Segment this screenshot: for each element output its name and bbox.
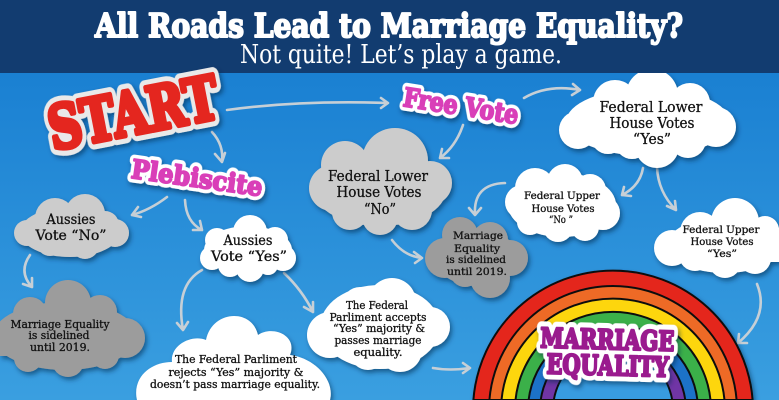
cloud: Parliament accepts: Parliment accepts xyxy=(330,311,427,324)
cloud: Federal Upper House Votes Yes: Federal Upper xyxy=(682,224,760,236)
cloud: sidelined until 2019 (left): until 2019. xyxy=(30,341,90,354)
Marriage Equality sign xyxy=(539,323,675,384)
cloud: Aussies Vote No: Vote “No” xyxy=(34,228,106,244)
title: All Roads Lead to Marriage Equality? xyxy=(94,6,683,45)
cloud: Federal Lower House Votes No: Federal Lower xyxy=(328,169,428,185)
cloud: Parliament accepts: The Federal xyxy=(346,299,408,312)
cloud: sidelined until 2019 (left): Marriage Equality xyxy=(10,318,110,331)
cloud: Federal Upper House Votes Yes: “Yes” xyxy=(707,248,737,260)
cloud: Federal Upper House Votes No: “No ” xyxy=(549,214,573,226)
cloud: Federal Upper House Votes Yes xyxy=(654,198,779,278)
cloud: sidelined until 2019 (right) xyxy=(425,217,528,298)
cloud: Federal Lower House Votes No: “No” xyxy=(364,202,396,218)
cloud: Parliament accepts: equality. xyxy=(354,346,402,359)
rainbow xyxy=(473,271,753,400)
cloud: sidelined until 2019 (left) xyxy=(0,280,145,377)
cloud: Federal Upper House Votes Yes: House Votes xyxy=(690,236,754,248)
cloud: sidelined until 2019 (left): is sidelined xyxy=(28,329,90,342)
cloud: Federal Lower House Votes Yes: “Yes” xyxy=(633,132,671,148)
cloud: Parliament rejects: rejects “Yes” majority & xyxy=(168,366,304,379)
cloud: Aussies Vote Yes xyxy=(200,215,296,282)
Plebiscite label: Plebiscite xyxy=(129,155,264,203)
START sign: START xyxy=(42,63,225,165)
cloud: Parliament accepts: passes marriage xyxy=(334,334,422,347)
arrows xyxy=(23,84,761,373)
cloud: Federal Lower House Votes Yes xyxy=(559,69,736,168)
cloud: Aussies Vote No xyxy=(14,194,129,259)
cloud: sidelined until 2019 (right): Equality xyxy=(454,243,500,255)
cloud: Federal Lower House Votes No xyxy=(309,128,452,235)
cloud: Parliament rejects: The Federal Parliment xyxy=(175,353,298,366)
cloud: Aussies Vote No: Aussies xyxy=(46,212,96,228)
cloud: Federal Upper House Votes No xyxy=(505,164,620,242)
cloud: Parliament rejects: doesn’t pass marriage equality. xyxy=(150,378,320,391)
cloud: Parliament accepts: “Yes” majority & xyxy=(333,322,425,335)
cloud: Parliament accepts xyxy=(307,278,450,372)
Marriage Equality sign: MARRIAGE xyxy=(540,323,675,358)
Plebiscite label: Plebiscite xyxy=(129,155,264,203)
cloud: Federal Upper House Votes No: House Votes xyxy=(532,203,594,215)
cloud: sidelined until 2019 (right): Marriage xyxy=(453,230,503,242)
cloud: Federal Upper House Votes No: Federal Upper xyxy=(524,190,601,202)
header banner xyxy=(0,0,779,73)
cloud: Federal Lower House Votes Yes: Federal Lower xyxy=(600,100,703,116)
cloud: Aussies Vote Yes: Aussies xyxy=(223,233,273,249)
Free Vote label: Free Vote xyxy=(401,83,520,131)
cloud: Aussies Vote Yes: Vote “Yes” xyxy=(210,249,287,265)
Free Vote label: Free Vote xyxy=(401,83,520,131)
cloud: sidelined until 2019 (right): until 2019. xyxy=(447,266,507,278)
START sign: START xyxy=(42,63,225,165)
cloud: Federal Lower House Votes Yes: House Votes xyxy=(610,116,694,132)
Marriage Equality sign: EQUALITY xyxy=(546,349,670,384)
cloud: Parliament rejects xyxy=(136,316,331,400)
Marriage Equality sign: EQUALITY xyxy=(546,349,670,384)
Marriage Equality sign: MARRIAGE xyxy=(540,323,675,358)
cloud: sidelined until 2019 (right): is sidelined xyxy=(446,254,506,266)
cloud: Federal Lower House Votes No: House Votes xyxy=(336,185,422,201)
subtitle: Not quite! Let’s play a game. xyxy=(240,40,562,70)
